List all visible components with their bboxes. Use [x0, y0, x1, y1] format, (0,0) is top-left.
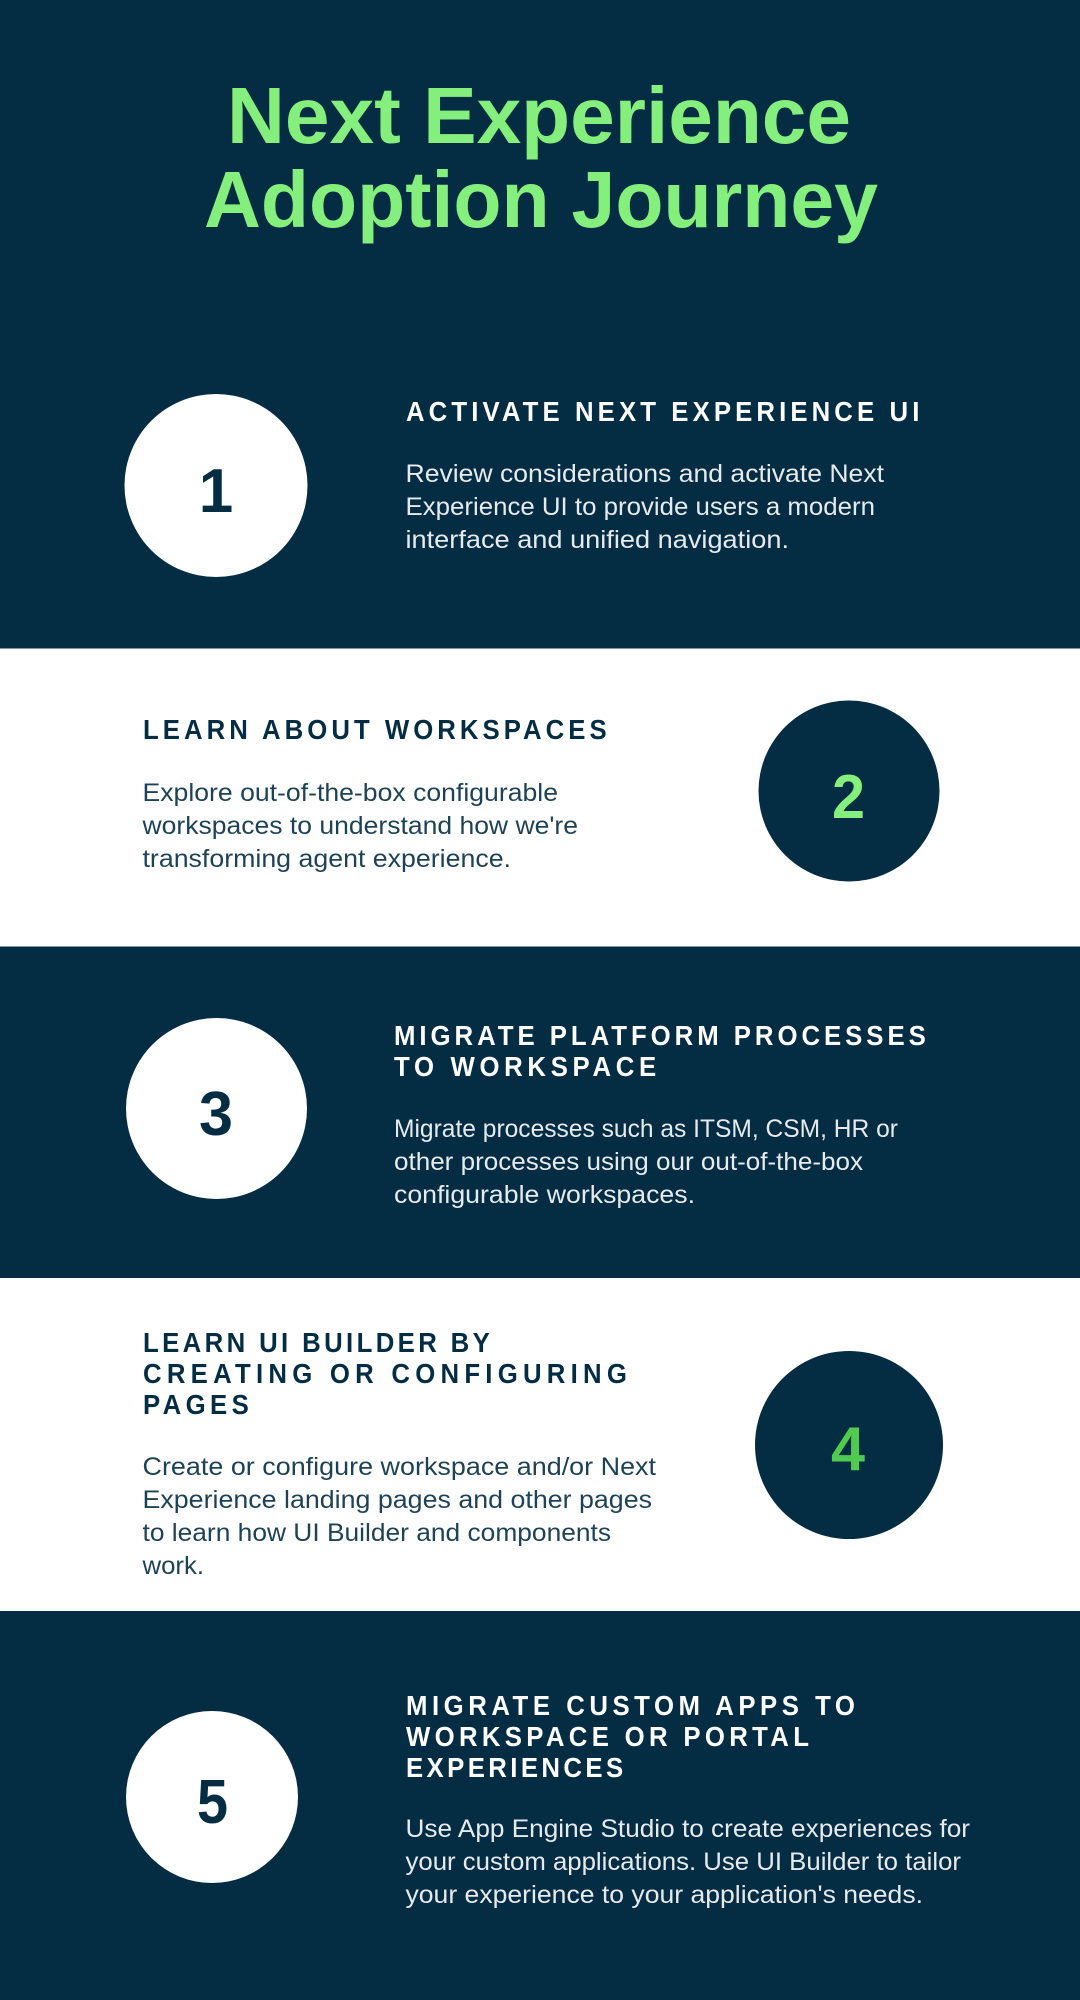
text block: step 4: Create or configure workspace and/or Next — [142, 1453, 656, 1481]
icon: number 3 circle: 3 — [199, 1080, 233, 1149]
heading: step 4 — [143, 1327, 627, 1420]
text block: step 4: Experience landing pages and other pages — [142, 1486, 652, 1514]
text block: step 3: Migrate processes such as ITSM, CSM, HR or — [394, 1115, 898, 1143]
heading: step 2: LEARN ABOUT WORKSPACES — [143, 714, 607, 745]
title — [204, 71, 878, 244]
icon: number 5 circle — [126, 1711, 298, 1883]
icon: number 4 circle: 4 — [831, 1415, 866, 1484]
text block: step 2 — [141, 779, 578, 873]
heading: step 1: ACTIVATE NEXT EXPERIENCE UI — [406, 396, 919, 427]
heading: step 5: EXPERIENCES — [406, 1752, 623, 1783]
text block: step 1: interface and unified navigation. — [406, 526, 789, 554]
icon: number 2 circle — [758, 700, 940, 882]
heading: step 4: LEARN UI BUILDER BY — [143, 1327, 490, 1358]
panel: step 2 — [0, 648, 1080, 946]
icon: number 3 circle — [126, 1018, 307, 1199]
text block: step 5: Use App Engine Studio to create experiences for — [406, 1815, 970, 1843]
panel: step 3 — [126, 1018, 926, 1209]
text block: step 2: workspaces to understand how we're — [141, 812, 578, 840]
text block: step 1: Review considerations and activate Next — [406, 460, 884, 488]
text block: step 4 — [141, 1453, 656, 1580]
panel: step 1 — [124, 394, 919, 577]
heading: step 5 — [406, 1690, 855, 1783]
icon: number 5 circle: 5 — [197, 1768, 228, 1837]
icon: number 4 circle — [755, 1351, 943, 1539]
text block: step 3: configurable workspaces. — [394, 1181, 695, 1209]
text block: step 5 — [406, 1815, 970, 1909]
text block: step 2: transforming agent experience. — [142, 845, 511, 873]
text block: step 4: to learn how UI Builder and components — [142, 1519, 611, 1547]
heading: step 5: MIGRATE CUSTOM APPS TO — [406, 1690, 855, 1721]
heading: step 4: CREATING OR CONFIGURING — [143, 1358, 627, 1389]
text block: step 1: Experience UI to provide users a modern — [406, 493, 875, 521]
title: Next Experience — [227, 71, 851, 160]
icon: number 1 circle: 1 — [199, 457, 233, 526]
title: Adoption Journey — [204, 155, 878, 244]
text block: step 5: your experience to your application's needs. — [406, 1881, 923, 1909]
heading: step 3: MIGRATE PLATFORM PROCESSES — [394, 1020, 926, 1051]
heading: step 5: WORKSPACE OR PORTAL — [406, 1721, 809, 1752]
text block: step 3: other processes using our out-of-the-box — [394, 1148, 864, 1176]
heading: step 3: TO WORKSPACE — [394, 1051, 656, 1082]
text block: step 2: Explore out-of-the-box configurable — [142, 779, 558, 807]
icon: number 1 circle — [124, 394, 308, 577]
text block: step 1 — [406, 460, 884, 554]
heading: step 3 — [394, 1020, 926, 1082]
text block: step 5: your custom applications. Use UI Builder to tailor — [406, 1848, 961, 1876]
panel: step 4 — [0, 1278, 1080, 1611]
icon: number 2 circle: 2 — [832, 763, 865, 832]
text block: step 3 — [394, 1115, 898, 1209]
heading: step 4: PAGES — [143, 1389, 249, 1420]
text block: step 4: work. — [141, 1552, 204, 1580]
panel: step 5 — [126, 1690, 970, 1909]
